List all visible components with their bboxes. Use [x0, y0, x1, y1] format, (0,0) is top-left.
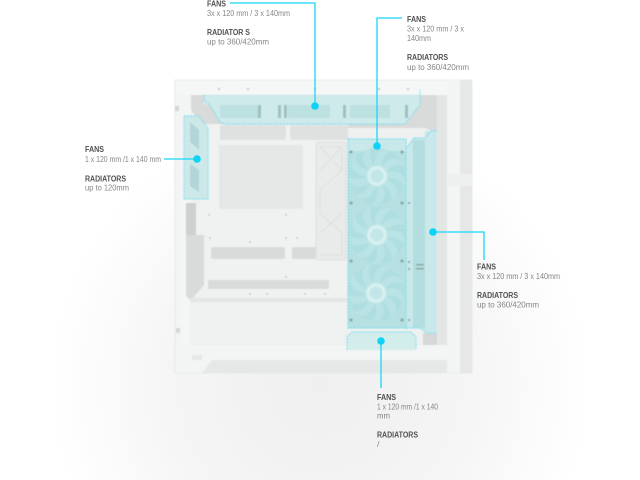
marker — [429, 228, 437, 236]
callout text: FANS — [377, 392, 396, 402]
right zone dashed outline — [406, 131, 437, 333]
leader line — [433, 232, 484, 260]
callout text: RADIATORS — [85, 174, 126, 184]
callout: front fans — [373, 14, 469, 150]
callout text: RADIATOR S — [207, 27, 250, 37]
right zone fan strip — [413, 140, 425, 328]
callout text — [407, 14, 469, 72]
front panel shade — [460, 80, 472, 373]
leader line — [230, 3, 315, 106]
bottom zone fill — [347, 332, 416, 350]
callout text — [207, 0, 290, 46]
interior back panel — [191, 95, 440, 345]
base — [202, 360, 447, 373]
marker — [311, 102, 319, 110]
callout text: 1 x 120 mm /1 x 140 — [377, 402, 438, 412]
side pass-through slot — [186, 235, 204, 300]
leader line — [380, 341, 382, 388]
callout text — [85, 144, 161, 192]
front fans zone — [345, 139, 409, 328]
PSU shroud — [190, 301, 347, 346]
left fan blades — [190, 122, 199, 192]
callout text: mm — [377, 410, 390, 420]
left fan zone — [184, 116, 208, 199]
marker — [373, 142, 381, 150]
callout text: up to 120mm — [85, 182, 129, 192]
marker — [193, 155, 201, 163]
callout text: up to 360/420mm — [477, 300, 539, 310]
front panel — [448, 80, 460, 373]
background floor shadow — [50, 110, 590, 480]
callout text: up to 360/420mm — [407, 62, 469, 72]
top fans zone — [204, 90, 420, 124]
callout text: 3x x 120 mm / 3 x 140mm — [477, 271, 560, 281]
mounting tabs — [175, 106, 180, 333]
bottom right corner block — [423, 333, 437, 345]
callout: rear fan — [85, 144, 201, 192]
foot — [192, 355, 202, 360]
right zone screws — [408, 202, 424, 321]
callout text: up to 360/420mm — [207, 36, 269, 46]
side panel strip — [182, 199, 191, 345]
top zone fill — [204, 95, 420, 124]
callout text: RADIATORS — [377, 430, 418, 440]
side slats — [186, 203, 196, 235]
top cable cut-outs — [220, 125, 348, 140]
callout text: RADIATORS — [407, 52, 448, 62]
callout text: / — [377, 439, 380, 449]
fan 1 — [346, 145, 409, 208]
case body — [175, 80, 472, 373]
front zone fill — [348, 139, 406, 328]
fan screws — [349, 150, 404, 322]
PC case — [175, 80, 472, 373]
callout text: FANS — [85, 144, 104, 154]
callout text: 3x x 120 mm / 3 x — [407, 24, 465, 34]
right side fan zone — [406, 131, 437, 333]
standoff pins — [208, 88, 409, 295]
leader line — [377, 18, 402, 146]
grommet panel — [316, 142, 346, 260]
right zone fill — [406, 131, 437, 333]
callout text: FANS — [477, 262, 496, 272]
right inner column — [437, 88, 447, 360]
top inner shade — [191, 95, 440, 135]
front zone top bracket — [348, 139, 406, 151]
front panel notch — [448, 174, 472, 186]
leader line — [164, 158, 197, 160]
callout text: 140mm — [407, 33, 431, 43]
top zone dashed outline — [204, 90, 420, 124]
top rail — [176, 81, 447, 95]
callout text: RADIATORS — [477, 290, 518, 300]
marker — [377, 337, 385, 345]
mid cable cut-outs — [208, 247, 329, 289]
fan 3 — [345, 262, 408, 325]
bottom fan zone — [347, 332, 416, 350]
top fan blades — [220, 105, 408, 118]
callout text: 1 x 120 mm /1 x 140 mm — [85, 154, 161, 164]
CPU cut-out — [219, 145, 303, 209]
front zone dashed outline — [348, 139, 406, 328]
callout text: 3x x 120 mm / 3 x 140mm — [207, 8, 290, 18]
shroud top shade — [190, 298, 347, 302]
left zone dashed outline — [184, 116, 208, 199]
bottom rail — [182, 345, 447, 360]
callout: side fans — [429, 228, 560, 310]
callout: bottom fan — [377, 337, 438, 449]
left zone fill — [184, 116, 208, 199]
callout text: FANS — [407, 14, 426, 24]
motherboard tray — [205, 124, 348, 300]
callout text — [377, 392, 438, 449]
callout text — [477, 262, 560, 310]
fan 2 — [346, 204, 409, 267]
callout: top fans — [207, 0, 319, 110]
bottom zone dashed outline — [347, 332, 416, 350]
